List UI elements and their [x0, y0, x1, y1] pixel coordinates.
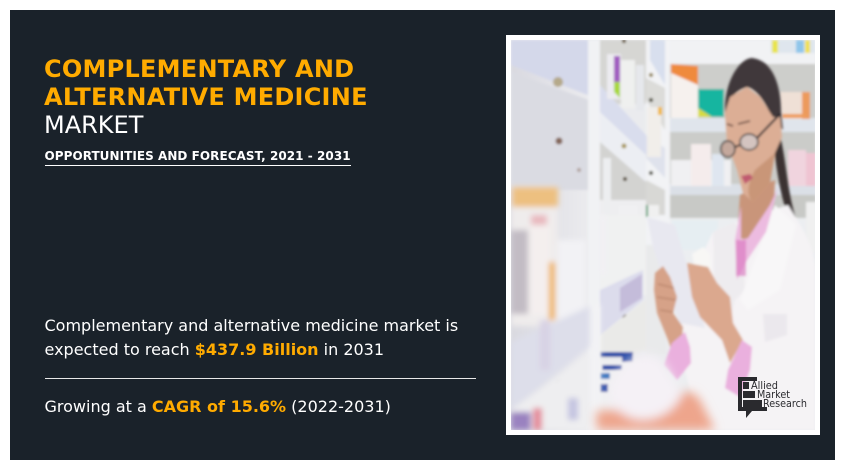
logo: Allied Market Research: Allied	[751, 380, 778, 392]
mid boxes	[671, 160, 731, 186]
right bay	[646, 40, 670, 245]
face	[725, 87, 782, 202]
logo: Allied Market Research	[738, 377, 807, 418]
pharmacist	[647, 58, 815, 430]
title	[44, 55, 368, 139]
neck and collar	[737, 180, 775, 240]
CAGR text: Growing at a CAGR of 15.6% (2022-2031)	[44, 397, 391, 416]
market value text	[44, 316, 458, 359]
small packs on shelf	[607, 54, 621, 99]
lower shelf bays	[600, 215, 646, 295]
right upper boxes	[780, 92, 810, 119]
shelves background	[505, 35, 825, 435]
teal box	[698, 89, 724, 117]
blurred left products	[511, 186, 606, 430]
hair	[725, 58, 783, 130]
photo: pharmacist at shelves	[506, 35, 820, 435]
title: MARKET	[44, 111, 143, 139]
logo: Allied Market Research: Research	[763, 398, 807, 410]
orange box	[671, 64, 698, 85]
right hand and arm	[687, 263, 743, 363]
bottle	[692, 247, 713, 295]
paper	[647, 217, 705, 328]
market value text: expected to reach $437.9 Billion in 2031	[44, 340, 384, 359]
peg holes	[553, 77, 563, 87]
left lavender wall	[511, 40, 589, 430]
inner shelf bays	[600, 40, 646, 104]
left pillar	[588, 40, 600, 430]
subtitle: OPPORTUNITIES AND FORECAST, 2021 - 2031	[44, 149, 351, 163]
market value text: Complementary and alternative medicine market is	[44, 316, 458, 335]
title: ALTERNATIVE MEDICINE	[44, 83, 368, 111]
right cuff	[725, 340, 752, 397]
left cuff	[664, 332, 691, 380]
title: COMPLEMENTARY AND	[44, 55, 354, 83]
left hand and arm	[654, 266, 683, 352]
glasses	[721, 141, 735, 157]
ponytail	[773, 130, 797, 222]
coat	[680, 205, 815, 430]
blurred foreground hand and bottle	[596, 355, 715, 430]
right back shelves	[668, 35, 818, 435]
logo: Allied Market Research: Market	[757, 389, 790, 401]
